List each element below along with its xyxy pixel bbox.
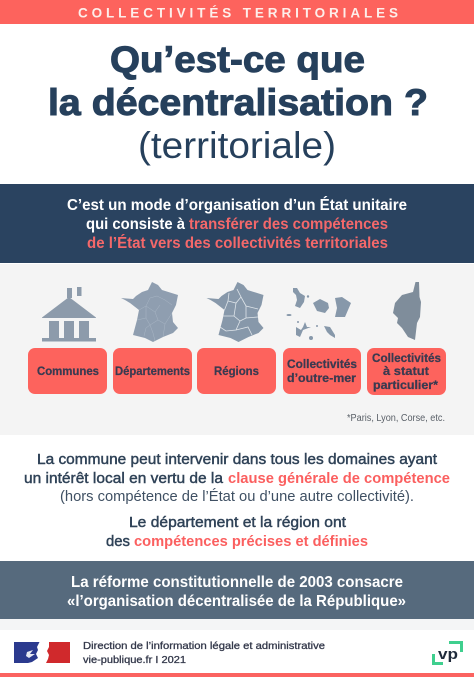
icon: map of départements	[121, 282, 178, 342]
reform band	[0, 561, 474, 619]
bottom stripe	[0, 673, 474, 677]
definition band: qui consiste à	[86, 216, 185, 233]
text block: département et région: Le département et la région ont	[129, 514, 347, 531]
text block: département et région	[106, 514, 368, 550]
logo: République française	[14, 642, 70, 663]
reform band: La réforme constitutionnelle de 2003 consacre	[71, 574, 403, 591]
panel: types of collectivités	[0, 264, 474, 435]
text block: département et région: des	[106, 533, 130, 550]
title: Qu’est-ce que	[110, 39, 365, 80]
definition band: C’est un mode d’organisation d’un État unitaire	[67, 197, 407, 214]
button: Départements: Départements	[115, 364, 190, 378]
text block: commune: clause générale de compétence	[228, 470, 450, 487]
icon: Corsica	[393, 282, 421, 340]
icon: town hall	[42, 287, 96, 342]
button: Collectivités d'outre-mer	[283, 348, 361, 394]
title: la décentralisation ?	[48, 82, 428, 123]
header banner	[0, 0, 474, 24]
title	[48, 39, 428, 166]
button: Communes	[28, 348, 107, 394]
button: Collectivités d'outre-mer: Collectivités	[287, 357, 357, 371]
footer credit text: vie-publique.fr I 2021	[83, 655, 186, 666]
footer credit text	[83, 641, 325, 666]
button: Départements	[113, 348, 192, 394]
definition band	[0, 184, 474, 263]
text block: commune	[24, 451, 450, 505]
button: Collectivités à statut particulier: à statut	[383, 364, 429, 378]
text block: commune: (hors compétence de l’État ou d’une autre collectivité).	[60, 488, 414, 505]
reform band: «l’organisation décentralisée de la République»	[67, 593, 406, 610]
button: Collectivités à statut particulier	[367, 348, 446, 395]
footer strip	[0, 619, 474, 630]
footnote: *Paris, Lyon, Corse, etc.	[347, 413, 445, 424]
button: Collectivités d'outre-mer: d’outre-mer	[287, 371, 356, 385]
text block: commune: La commune peut intervenir dans tous les domaines ayant	[37, 451, 438, 468]
button: Régions: Régions	[214, 364, 259, 378]
button: Régions	[197, 348, 276, 394]
definition band: transférer des compétences	[189, 216, 388, 233]
header banner: COLLECTIVITÉS TERRITORIALES	[78, 6, 398, 20]
button: Collectivités à statut particulier: Collectivités	[372, 351, 441, 365]
title: (territoriale)	[138, 125, 336, 166]
footer credit text: Direction de l’information légale et administrative	[83, 641, 325, 652]
text block: commune: un intérêt local en vertu de la	[24, 470, 224, 487]
definition band: de l’État vers des collectivités territoriales	[87, 235, 388, 252]
icon: map of régions	[206, 282, 264, 342]
logo: vp: vp	[438, 646, 458, 663]
text block: département et région: compétences précises et définies	[134, 533, 368, 550]
icon: overseas territories	[286, 288, 351, 340]
logo: vp	[434, 642, 462, 664]
button: Collectivités à statut particulier: particulier*	[373, 378, 438, 392]
button: Communes: Communes	[37, 364, 99, 378]
